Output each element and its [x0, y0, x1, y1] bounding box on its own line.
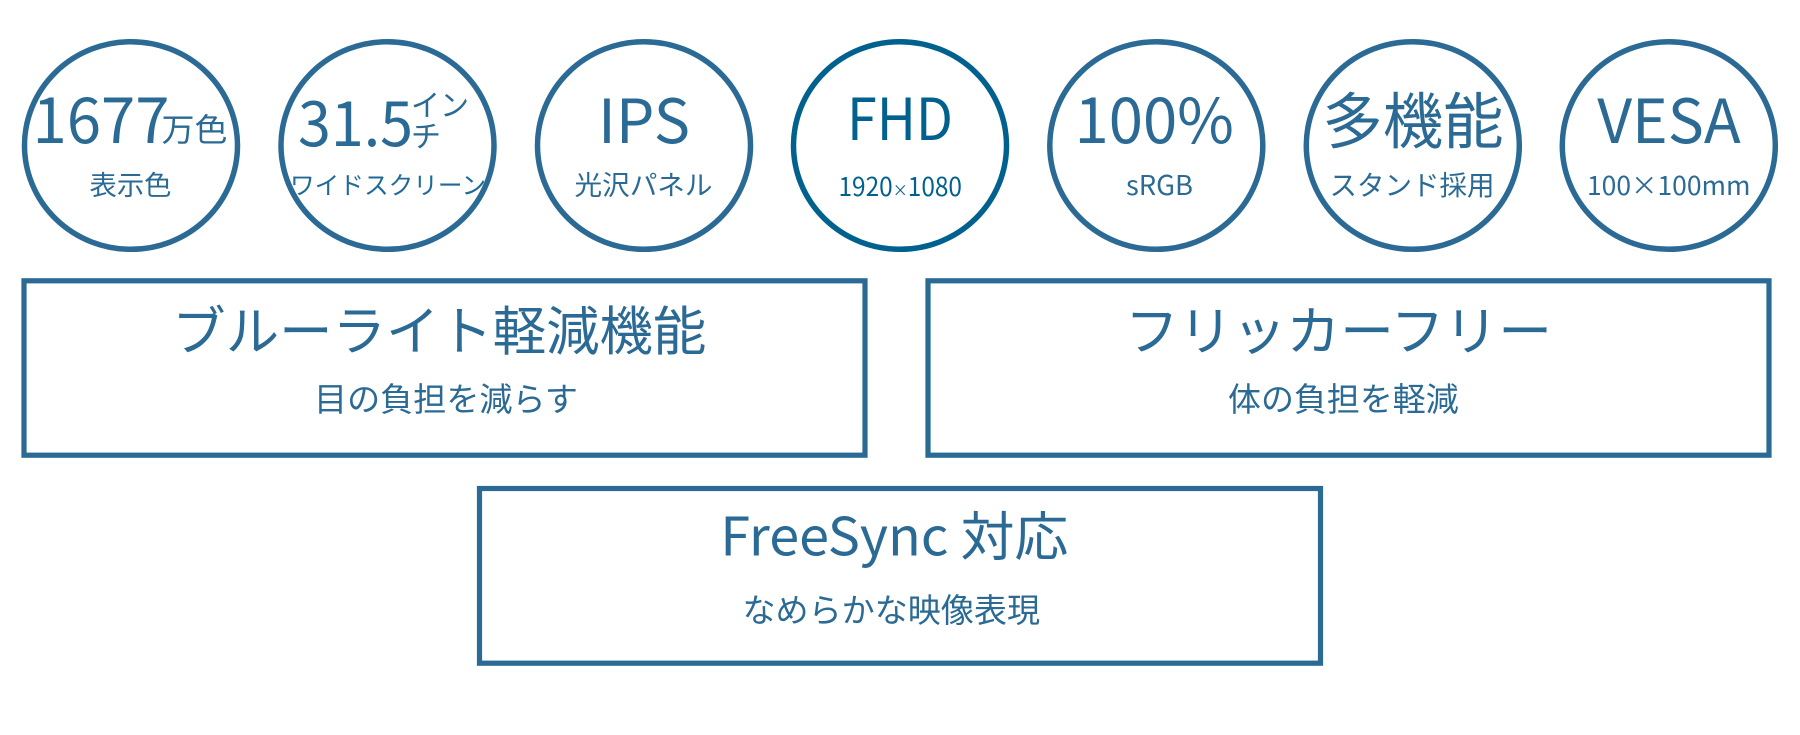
- badge: FHD resolution: 1920×1080: [838, 167, 962, 204]
- panel: blue light reduction: ブルーライト軽減機能: [172, 290, 706, 366]
- panel: FreeSync support: [480, 488, 1320, 663]
- panel: blue light reduction: 目の負担を減らす: [314, 373, 578, 421]
- badge: 100% sRGB: [1050, 42, 1263, 249]
- badge: 16.77 million colours: [24, 42, 238, 249]
- panel: flicker free: [928, 281, 1769, 455]
- badge: multifunction stand: [1306, 42, 1519, 249]
- badge: 31.5 inch widescreen: イン: [411, 81, 469, 125]
- panel: FreeSync support: FreeSync 対応: [720, 496, 1068, 572]
- badge: IPS glossy panel: IPS: [598, 72, 690, 161]
- panel: flicker free: フリッカーフリー: [1125, 290, 1552, 366]
- badge: IPS glossy panel: [538, 42, 750, 249]
- badge: 31.5 inch widescreen: ワイドスクリーン: [290, 167, 486, 202]
- badge: 100% sRGB: 100%: [1074, 71, 1234, 161]
- badge: IPS glossy panel: 光沢パネル: [574, 164, 712, 203]
- panel: flicker free: 体の負担を軽減: [1228, 373, 1459, 421]
- badge: 31.5 inch widescreen: 31.5: [298, 75, 413, 164]
- badge: FHD resolution: FHD: [847, 73, 953, 157]
- badge: 16.77 million colours: 1677: [32, 71, 170, 161]
- panel: blue light reduction: [24, 281, 865, 455]
- badge: VESA mount: VESA: [1597, 72, 1741, 161]
- badge: multifunction stand: スタンド採用: [1330, 163, 1494, 203]
- badge: 100% sRGB: sRGB: [1126, 164, 1193, 203]
- badge: multifunction stand: 多機能: [1322, 72, 1504, 161]
- badge: VESA mount: [1562, 42, 1775, 249]
- badge: 31.5 inch widescreen: [281, 42, 494, 249]
- badge: 16.77 million colours: 表示色: [90, 164, 172, 203]
- panel: FreeSync support: なめらかな映像表現: [742, 584, 1040, 632]
- badge: FHD resolution: [794, 42, 1006, 249]
- badge: 31.5 inch widescreen: チ: [411, 112, 441, 156]
- badge: VESA mount: 100×100mm: [1587, 166, 1750, 203]
- badge: 16.77 million colours: 万色: [162, 105, 228, 151]
